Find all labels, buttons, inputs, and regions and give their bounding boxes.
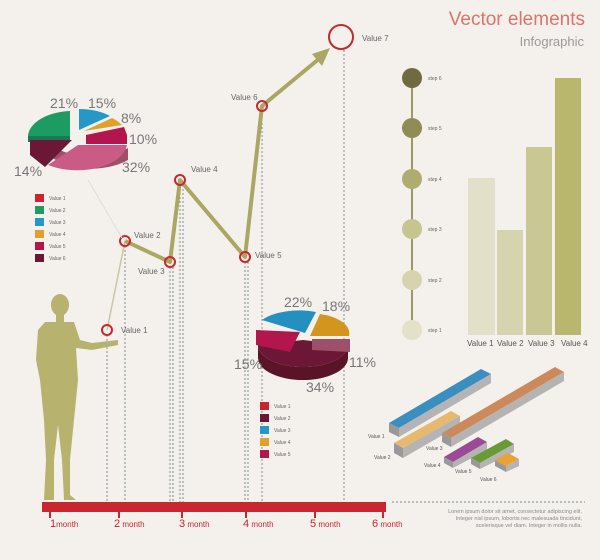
pie chart 1: 10% (129, 131, 157, 147)
step timeline (402, 68, 442, 340)
dotted guide lines (107, 50, 585, 502)
pie chart 1: 32% (122, 159, 150, 175)
lorem text (448, 509, 582, 529)
pie chart 1: 15% (88, 95, 116, 111)
lorem text: Integer nisl ipsum, lobortis nec malesuada tincidunt, (456, 516, 582, 522)
line chart: Value 6 (231, 93, 258, 102)
legend 1: Value 5 (49, 244, 66, 250)
step timeline: step 1 (428, 328, 442, 334)
legend 1: Value 2 (49, 208, 66, 214)
pie chart 1: 14% (14, 163, 42, 179)
bar chart: Value 1 (467, 339, 494, 348)
bar chart: Value 4 (561, 339, 588, 348)
step timeline: step 5 (428, 126, 442, 132)
timeline: 2 month (114, 518, 145, 530)
pie chart 2: 11% (349, 354, 376, 370)
step timeline: step 4 (428, 177, 442, 183)
line chart: Value 3 (138, 267, 165, 276)
line chart (102, 25, 389, 335)
line chart: Value 1 (121, 326, 148, 335)
timeline: 6 month (372, 518, 403, 530)
pie chart 2: 22% (284, 294, 312, 310)
isometric bars: Value 6 (480, 477, 497, 483)
legend 2: Value 5 (274, 452, 291, 458)
title (449, 9, 585, 49)
line chart: Value 2 (134, 231, 161, 240)
line chart: Value 4 (191, 165, 218, 174)
timeline: 4 month (243, 518, 274, 530)
isometric bars: Value 3 (426, 446, 443, 452)
pie chart 1 (14, 95, 157, 238)
legend 1: Value 4 (49, 232, 66, 238)
legend 2: Value 1 (274, 404, 291, 410)
timeline: 3 month (179, 518, 210, 530)
timeline: 1month (50, 518, 78, 530)
legend 1: Value 1 (49, 196, 66, 202)
line chart: Value 7 (362, 34, 389, 43)
isometric bars: Value 1 (368, 434, 385, 440)
pie chart 2: 18% (322, 298, 350, 314)
lorem text: scelerisque vel diam. Integer in mollis nulla. (476, 523, 582, 529)
title: Infographic (520, 34, 584, 49)
isometric bars (368, 367, 564, 483)
legend 1: Value 6 (49, 256, 66, 262)
timeline: 5 month (310, 518, 341, 530)
legend 2: Value 4 (274, 440, 291, 446)
pie chart 1: 8% (121, 110, 141, 126)
timeline (42, 502, 403, 530)
legend 2: Value 2 (274, 416, 291, 422)
bar chart: Value 2 (497, 339, 524, 348)
pie chart 2 (234, 294, 376, 395)
lorem text: Lorem ipsum dolor sit amet, consectetur adipiscing elit. (448, 509, 582, 515)
isometric bars: Value 4 (424, 463, 441, 469)
isometric bars: Value 2 (374, 455, 391, 461)
legend 1 (35, 194, 66, 262)
line chart: Value 5 (255, 251, 282, 260)
step timeline: step 3 (428, 227, 442, 233)
legend 2 (260, 402, 291, 458)
title: Vector elements (449, 9, 585, 30)
legend 1: Value 3 (49, 220, 66, 226)
bar chart (467, 78, 588, 348)
pie chart 2: 15% (234, 356, 262, 372)
step timeline: step 2 (428, 278, 442, 284)
legend 2: Value 3 (274, 428, 291, 434)
pie chart 2: 34% (306, 379, 334, 395)
pie chart 1: 21% (50, 95, 78, 111)
step timeline: step 6 (428, 76, 442, 82)
isometric bars: Value 5 (455, 469, 472, 475)
bar chart: Value 3 (528, 339, 555, 348)
woman silhouette (36, 294, 118, 500)
